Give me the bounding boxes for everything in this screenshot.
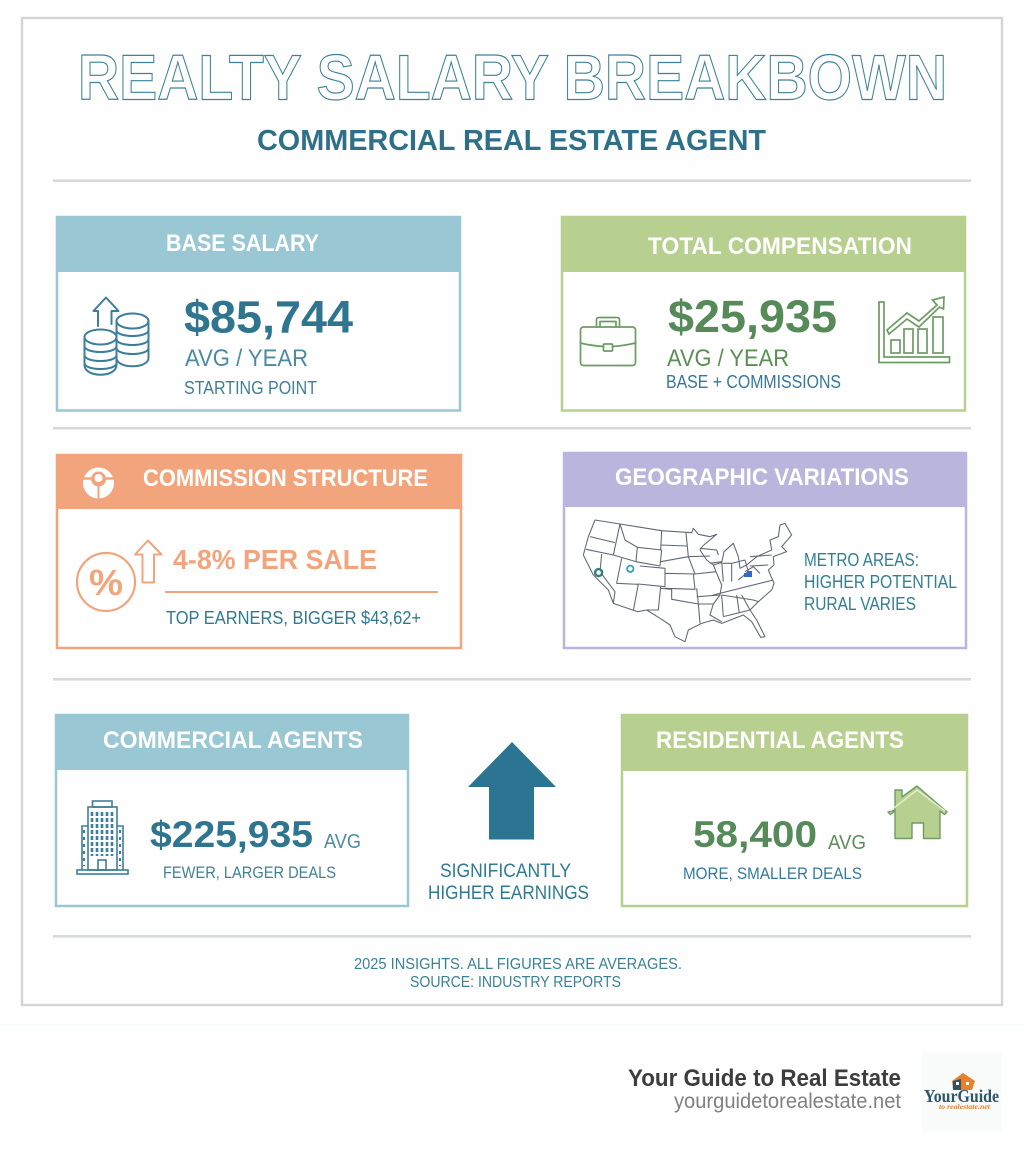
label: avg per year: AVG / YEAR xyxy=(185,345,308,372)
icon: coin stacks with up arrow xyxy=(84,298,148,375)
heading: base salary: BASE SALARY xyxy=(166,230,319,257)
value: total compensation: $25,935 xyxy=(668,291,837,342)
panel: commission structure xyxy=(56,454,462,648)
map pin: utah xyxy=(627,566,634,572)
text: metro areas: METRO AREAS: xyxy=(804,550,919,570)
label: avg per year: AVG / YEAR xyxy=(667,345,789,372)
heading: commercial agents: COMMERCIAL AGENTS xyxy=(103,727,363,754)
label: avg: AVG xyxy=(324,831,361,853)
icon: briefcase xyxy=(580,318,636,366)
panel: geographic variations xyxy=(563,452,967,648)
logo: to realestate.net xyxy=(939,1103,991,1111)
icon: percent circle: % xyxy=(89,562,123,603)
value: residential earnings: 58,400 xyxy=(693,814,817,855)
note: more smaller deals: MORE, SMALLER DEALS xyxy=(683,864,862,883)
value: commission percent: 4-8% PER SALE xyxy=(173,544,377,575)
footer brand name: Your Guide to Real Estate xyxy=(628,1065,901,1092)
value: commercial earnings: $225,935 xyxy=(150,814,313,855)
text: metro areas: HIGHER POTENTIAL xyxy=(804,572,957,592)
panel: commercial agents xyxy=(55,714,409,906)
panel: total compensation xyxy=(561,216,966,410)
icon: office building xyxy=(77,801,128,874)
icon: percent circle xyxy=(77,553,135,611)
heading: total compensation: TOTAL COMPENSATION xyxy=(648,233,912,260)
icon: growth chart xyxy=(879,297,950,362)
value: base salary: $85,744 xyxy=(184,292,353,342)
note: top earners: TOP EARNERS, BIGGER $43,62+ xyxy=(166,608,421,628)
icon: outlined up arrow xyxy=(135,540,162,582)
text: significantly higher earnings xyxy=(428,861,589,904)
text: significantly higher earnings: HIGHER EARNINGS xyxy=(428,883,589,904)
heading: geographic variations: GEOGRAPHIC VARIATIONS xyxy=(615,464,909,491)
source note: SOURCE: INDUSTRY REPORTS xyxy=(410,974,621,991)
text: significantly higher earnings: SIGNIFICANTLY xyxy=(440,861,571,882)
heading: residential agents: RESIDENTIAL AGENTS xyxy=(656,727,904,754)
label: avg: AVG xyxy=(828,832,866,854)
footer url: yourguidetorealestate.net xyxy=(674,1090,901,1113)
logo: YourGuide xyxy=(924,1086,999,1106)
note: starting point: STARTING POINT xyxy=(184,378,317,398)
note: base plus commissions: BASE + COMMISSIONS xyxy=(666,372,841,392)
text: metro areas xyxy=(804,550,957,614)
arrow: higher earnings xyxy=(468,742,556,840)
text: metro areas: RURAL VARIES xyxy=(804,594,916,614)
subtitle: COMMERCIAL REAL ESTATE AGENT xyxy=(257,125,766,157)
source note: 2025 INSIGHTS. ALL FIGURES ARE AVERAGES. xyxy=(354,956,682,973)
heading: commission structure: COMMISSION STRUCTURE xyxy=(143,465,428,492)
map pin: california xyxy=(595,569,602,576)
note: fewer larger deals: FEWER, LARGER DEALS xyxy=(163,863,336,882)
map: United States xyxy=(583,520,792,642)
source note xyxy=(354,956,682,991)
icon: commission badge xyxy=(83,468,114,499)
logo xyxy=(922,1052,1002,1132)
panel: residential agents xyxy=(621,714,968,906)
map marker: east xyxy=(744,571,752,577)
icon: house xyxy=(888,786,947,838)
panel: base salary xyxy=(56,216,461,410)
